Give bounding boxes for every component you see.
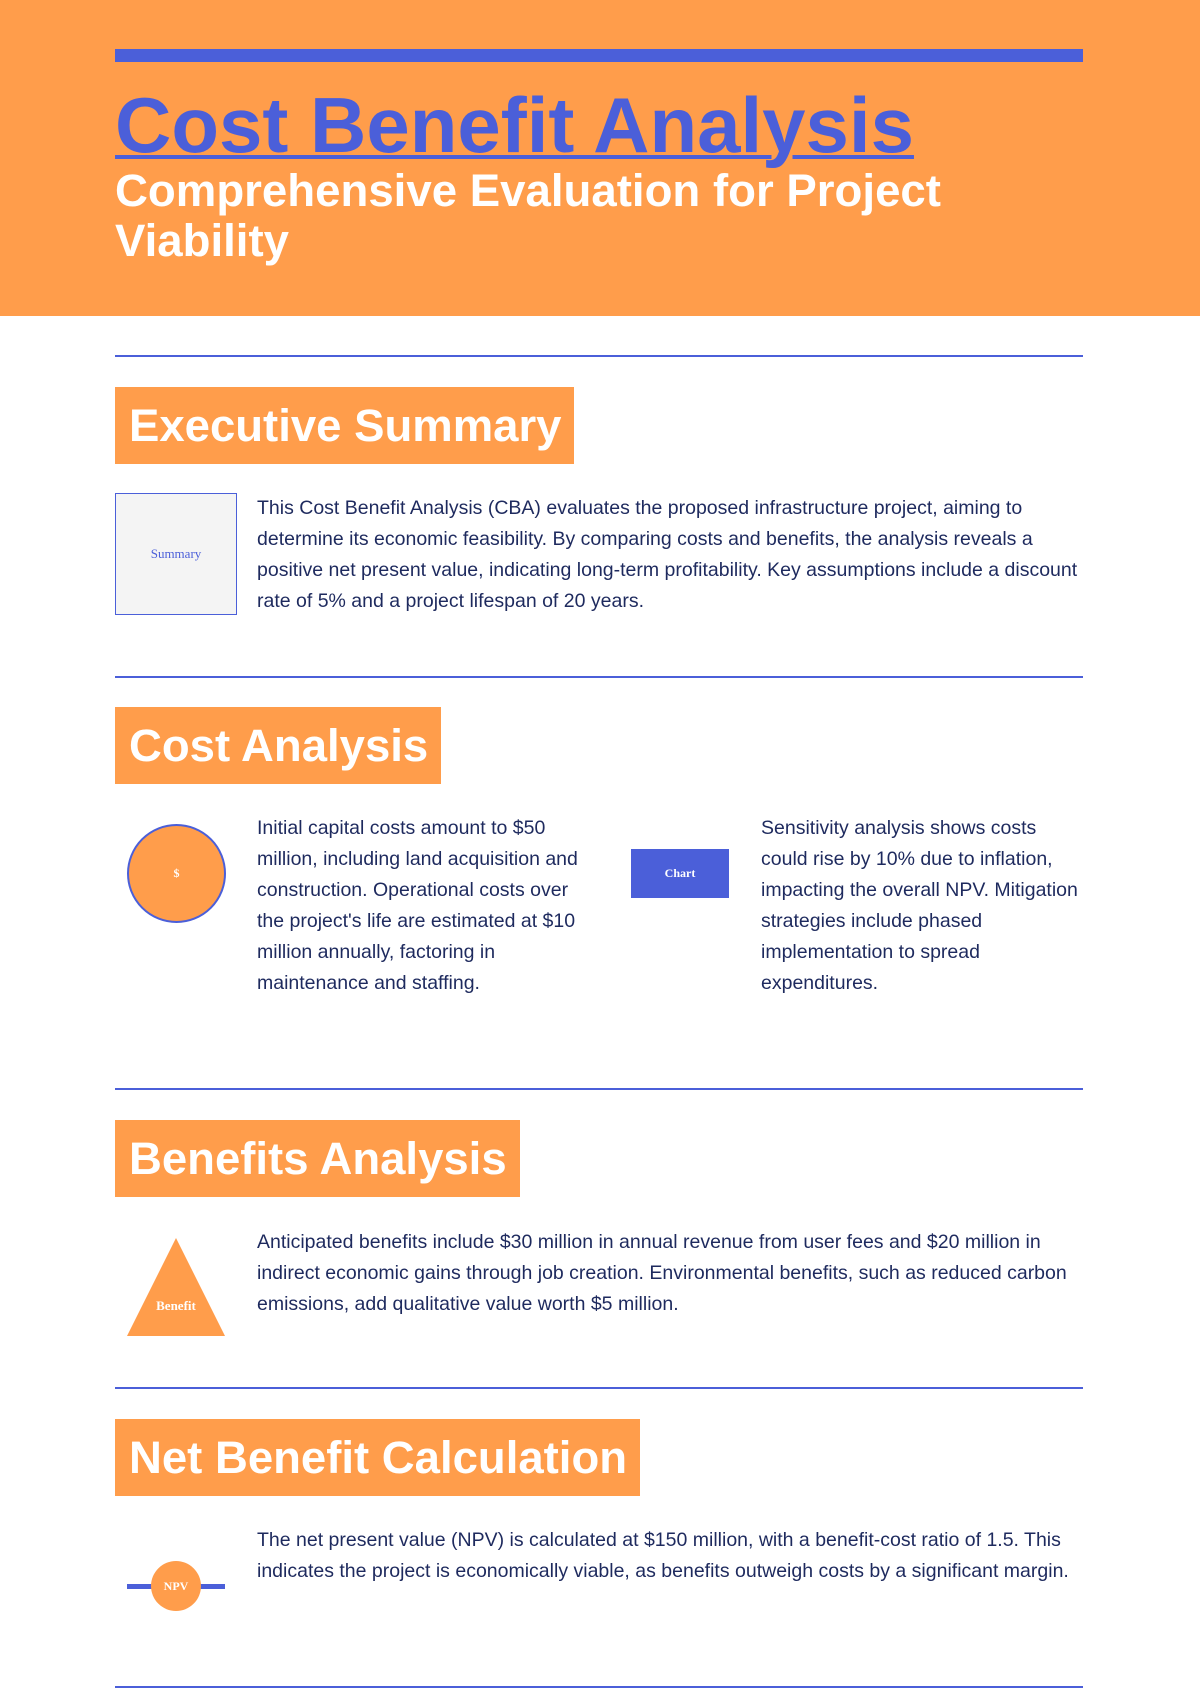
icon: benefit triangle [127, 1238, 225, 1336]
text: capital costs: Initial capital costs amount to $50 million, including land acquisition and construction. Operational costs over the project's life are estimated at $10 million annually, factoring in maintenance and staffing. [257, 817, 578, 994]
header banner [0, 0, 1200, 316]
icon: summary box: Summary [151, 546, 201, 561]
heading: Executive Summary: Executive Summary [129, 400, 561, 451]
heading: Net Benefit Calculation [115, 1419, 640, 1496]
heading: Cost Analysis: Cost Analysis [129, 720, 428, 771]
text: benefits: Anticipated benefits include $30 million in annual revenue from user fees and $20 million in indirect economic gains through job creation. Environmental benefits, such as reduced carbon emissions, add qualitative value worth $5 million. [257, 1231, 1067, 1315]
icon: benefit triangle: Benefit [156, 1298, 196, 1313]
heading: Benefits Analysis: Benefits Analysis [129, 1133, 507, 1184]
icon: chart box: Chart [665, 866, 695, 880]
icon: NPV: NPV [164, 1579, 188, 1593]
heading: Net Benefit Calculation: Net Benefit Calculation [129, 1432, 627, 1483]
subtitle: Comprehensive Evaluation for Project Viability [115, 165, 941, 266]
text: executive summary: This Cost Benefit Analysis (CBA) evaluates the proposed infrastructure project, aiming to determine its economic feasibility. By comparing costs and benefits, the analysis reveals a positive net present value, indicating long-term profitability. Key assumptions include a discount rate of 5% and a project lifespan of 20 years. [257, 497, 1077, 612]
icon: dollar circle: $ [174, 866, 180, 880]
header accent bar [115, 49, 1083, 62]
icon: summary box [115, 493, 237, 615]
heading: Benefits Analysis [115, 1120, 520, 1197]
text: NPV: The net present value (NPV) is calculated at $150 million, with a benefit-cost ratio of 1.5. This indicates the project is economically viable, as benefits outweigh costs by a significant margin. [257, 1529, 1069, 1582]
icon: NPV [127, 1561, 225, 1611]
heading: Cost Analysis [115, 707, 441, 784]
icon: dollar circle [127, 824, 226, 923]
text: sensitivity: Sensitivity analysis shows costs could rise by 10% due to inflation, impacting the overall NPV. Mitigation strategies include phased implementation to spread expenditures. [761, 817, 1078, 994]
icon: chart box [631, 849, 729, 898]
heading: Executive Summary [115, 387, 574, 464]
title: Cost Benefit Analysis [115, 81, 914, 169]
